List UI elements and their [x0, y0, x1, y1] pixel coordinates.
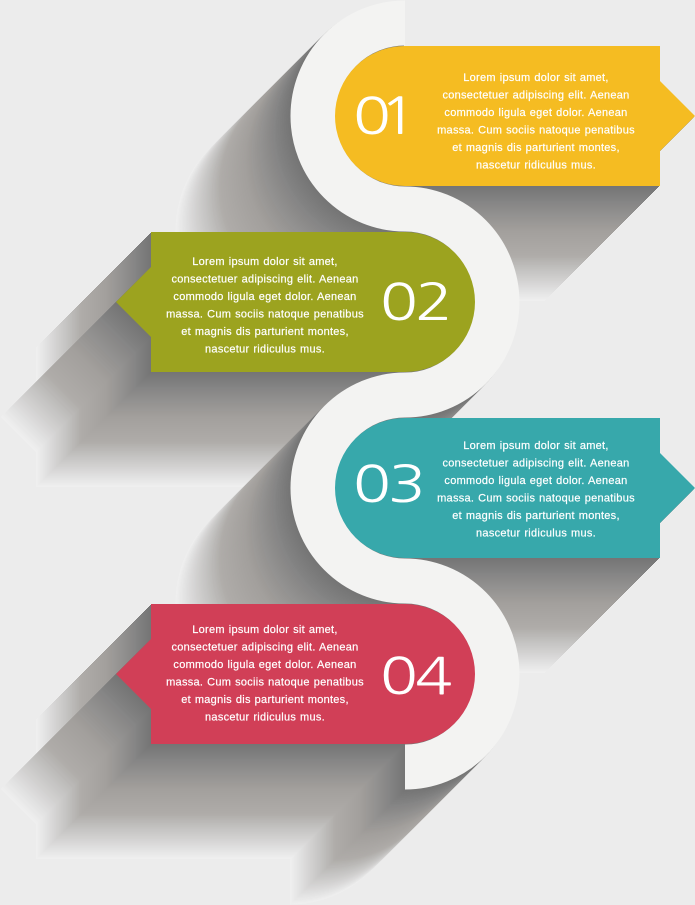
text block 03: et magnis dis parturient montes,: [452, 510, 620, 522]
text block 04: consectetuer adipiscing elit. Aenean: [171, 642, 359, 654]
text block 03: [437, 440, 635, 540]
text block 03: Lorem ipsum dolor sit amet,: [463, 440, 609, 452]
panel: step 01: [335, 46, 695, 186]
text block 04: nascetur ridiculus mus.: [205, 712, 325, 724]
text block 01: consectetuer adipiscing elit. Aenean: [442, 90, 630, 102]
text block 02: commodo ligula eget dolor. Aenean: [173, 291, 357, 303]
text block 02: massa. Cum sociis natoque penatibus: [166, 308, 364, 320]
number 04: 04: [380, 652, 453, 702]
text block 03: consectetuer adipiscing elit. Aenean: [442, 458, 630, 470]
text block 03: commodo ligula eget dolor. Aenean: [444, 475, 628, 487]
text block 02: nascetur ridiculus mus.: [205, 344, 325, 356]
text block 04: et magnis dis parturient montes,: [181, 694, 349, 706]
text block 03: nascetur ridiculus mus.: [476, 528, 596, 540]
text block 02: [166, 256, 364, 356]
text block 04: Lorem ipsum dolor sit amet,: [192, 624, 338, 636]
text block 01: massa. Cum sociis natoque penatibus: [437, 124, 635, 136]
text block 02: Lorem ipsum dolor sit amet,: [192, 256, 338, 268]
text block 03: massa. Cum sociis natoque penatibus: [437, 492, 635, 504]
text block 01: et magnis dis parturient montes,: [452, 142, 620, 154]
text block 01: nascetur ridiculus mus.: [476, 160, 596, 172]
number 03: 03: [353, 460, 426, 510]
number 02: 02: [380, 278, 453, 328]
text block 04: [166, 624, 364, 724]
text block 01: Lorem ipsum dolor sit amet,: [463, 72, 609, 84]
text block 04: massa. Cum sociis natoque penatibus: [166, 676, 364, 688]
text block 02: et magnis dis parturient montes,: [181, 326, 349, 338]
text block 01: [437, 72, 635, 172]
text block 02: consectetuer adipiscing elit. Aenean: [171, 274, 359, 286]
number 01: 01: [353, 92, 417, 142]
white wave ribbon: [313, 23, 497, 767]
text block 01: commodo ligula eget dolor. Aenean: [444, 107, 628, 119]
panel: step 04: [116, 604, 475, 744]
panel: step 02: [116, 232, 475, 372]
panel: step 03: [335, 418, 695, 558]
text block 04: commodo ligula eget dolor. Aenean: [173, 659, 357, 671]
